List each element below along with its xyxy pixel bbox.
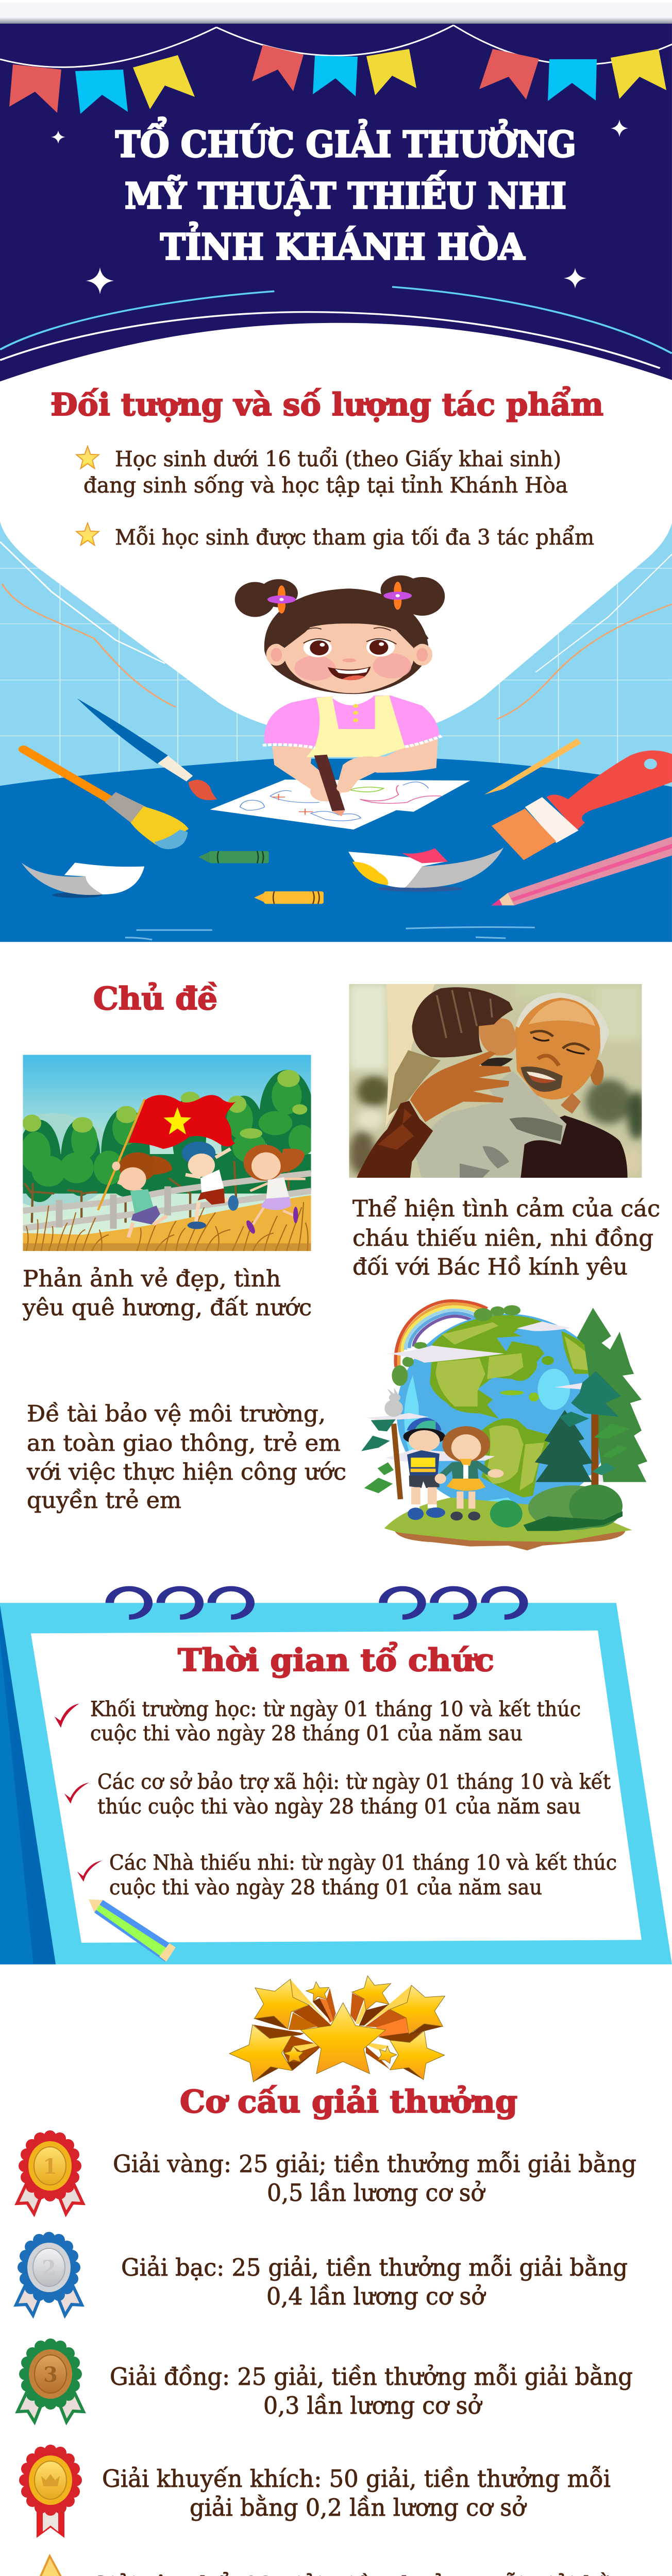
image: photo of Bác Hồ hugging a child: [349, 984, 647, 1178]
girl: [235, 575, 445, 817]
paper with doodles: [210, 779, 470, 829]
text: silver prize: Giải bạc: 25 giải, tiền thưởng mỗi giải bằng: [121, 2253, 628, 2281]
blurred background: [349, 984, 647, 1176]
text: theme labels: Đề tài bảo vệ môi trường,: [27, 1401, 326, 1427]
title: MỸ THUẬT THIẾU NHI: [125, 172, 566, 217]
panel: eligibility text: Học sinh dưới 16 tuổi (theo Giấy khai sinh): [115, 447, 561, 471]
icon: bronze medal: [18, 2338, 83, 2422]
text: schedule: thúc cuộc thi vào ngày 28 tháng 01 của năm sau: [97, 1795, 581, 1819]
text: theme labels: an toàn giao thông, trẻ em: [27, 1430, 341, 1456]
text: theme labels: đối với Bác Hồ kính yêu: [352, 1254, 628, 1280]
curled papers: [22, 848, 503, 898]
icon: golden stars cluster: [229, 1976, 445, 2082]
yellow pencil: [484, 738, 581, 794]
text: silver prize: [121, 2253, 628, 2310]
text: gold prize: Giải vàng: 25 giải; tiền thưởng mỗi giải bằng: [113, 2150, 636, 2178]
bushes: [392, 1305, 520, 1386]
header band: [0, 3, 672, 381]
bunting strings: [0, 25, 672, 67]
ground: [23, 1195, 311, 1251]
text: schedule: cuộc thi vào ngày 28 tháng 01 của năm sau: [109, 1876, 542, 1900]
text: theme labels: quyền trẻ em: [27, 1487, 181, 1514]
text: encouragement prize: Giải khuyến khích: 50 giải, tiền thưởng mỗi: [102, 2465, 611, 2493]
teal pine and leaves: [591, 1401, 598, 1485]
illustration: child drawing at table: [0, 521, 672, 942]
text: schedule: Các Nhà thiếu nhi: từ ngày 01 tháng 10 và kết thúc: [109, 1851, 617, 1875]
trees: [18, 1070, 314, 1202]
grass: [26, 1202, 308, 1251]
fence: [23, 1173, 311, 1228]
text: encouragement prize: [102, 2465, 611, 2521]
island ground: [395, 1531, 626, 1550]
icon: gold medal: 1: [43, 2155, 57, 2179]
heading: chủ đề: Chủ đề: [93, 981, 217, 1017]
panel: eligibility text: [76, 446, 594, 550]
running girl: [244, 1145, 306, 1235]
panel: eligibility text: đang sinh sống và học tập tại tỉnh Khánh Hòa: [83, 473, 568, 498]
boy: [182, 1142, 239, 1229]
girl figure: [435, 1426, 503, 1520]
water strokes: [125, 927, 535, 940]
stars: [229, 1976, 445, 2082]
icon: silver medal: 2: [42, 2256, 56, 2280]
panel: eligibility text: Mỗi học sinh được tham gia tối đa 3 tác phẩm: [115, 525, 594, 550]
icon: gold medal: [17, 2130, 83, 2214]
text: schedule: [90, 1698, 617, 1900]
sleeve: [357, 1101, 433, 1178]
table: [0, 759, 672, 942]
globe: [397, 1314, 616, 1511]
boy figure: [403, 1418, 445, 1520]
kid with flag: [112, 1153, 173, 1238]
title: TỈNH KHÁNH HÒA: [160, 223, 525, 268]
face: [284, 623, 414, 693]
red house-paint brush: [492, 751, 672, 860]
hair back and buns: [235, 582, 275, 617]
pink pencil: [492, 837, 672, 905]
tree trunks: [24, 1161, 289, 1223]
image: earth with children: [361, 1301, 647, 1550]
panel: calendar: [0, 1589, 672, 1964]
text: schedule: Các cơ sở bảo trợ xã hội: từ ngày 01 tháng 10 và kết: [97, 1770, 611, 1794]
rainbow: [396, 1301, 487, 1367]
text: theme labels: Phản ảnh vẻ đẹp, tình: [23, 1266, 281, 1292]
vietnamese flag: [98, 1095, 236, 1209]
text: gold prize: 0,5 lần lương cơ sở: [267, 2179, 485, 2207]
shrubs: [528, 1485, 618, 1530]
heading: đối tượng: Đối tượng và số lượng tác phẩm: [51, 386, 603, 423]
child jacket: [416, 1071, 566, 1178]
heading: thời gian tổ chức: Thời gian tổ chức: [178, 1642, 494, 1679]
blue brush: [77, 699, 217, 800]
text: silver prize: 0,4 lần lương cơ sở: [266, 2282, 486, 2310]
check marks: [55, 1704, 102, 1882]
calendar rings: [110, 1589, 524, 1617]
text: encouragement prize: giải bằng 0,2 lần lương cơ sở: [190, 2494, 527, 2521]
icon: silver medal: [16, 2232, 82, 2315]
icon: star bullet 1: [76, 446, 99, 468]
text: bronze prize: 0,3 lần lương cơ sở: [263, 2392, 482, 2419]
clouds: [366, 1321, 632, 1482]
hands: [561, 1093, 581, 1114]
image: children with flag: [0, 1055, 315, 1251]
sparkles: [51, 120, 628, 294]
face: [590, 1060, 603, 1086]
text: schedule: Khối trường học: từ ngày 01 tháng 10 và kết thúc: [90, 1698, 581, 1721]
star rays: [254, 1979, 443, 2082]
navy arched header: [0, 24, 672, 381]
text: bronze prize: [110, 2363, 633, 2419]
arc strokes: [0, 287, 672, 368]
hands and pencil: [310, 782, 341, 802]
text: theme labels: [22, 1195, 660, 1514]
hair flowers: [267, 582, 412, 614]
title: [115, 118, 576, 268]
tree trunk: [385, 984, 435, 1127]
continents: [430, 1315, 544, 1418]
ears: [266, 644, 287, 666]
text: gold prize: [113, 2150, 636, 2207]
icon: star bullet 2: [76, 523, 99, 545]
sky background: [0, 521, 672, 788]
child head: [479, 1019, 517, 1056]
orange paint brush: [24, 749, 189, 849]
tall pine: [577, 1308, 647, 1482]
text: schedule: cuộc thi vào ngày 28 tháng 01 của năm sau: [90, 1722, 523, 1745]
rabbit: [384, 1387, 403, 1417]
dark coat: [517, 1115, 628, 1178]
text: theme labels: với việc thực hiện công ước: [26, 1459, 346, 1485]
heading: cơ cấu giải thưởng: Cơ cấu giải thưởng: [180, 2084, 517, 2120]
left tree: [394, 1423, 400, 1499]
text: theme labels: Thể hiện tình cảm của các: [352, 1195, 660, 1222]
crayons: [198, 851, 324, 904]
bunting flags: [9, 45, 666, 114]
icon: encouragement medal: [19, 2445, 82, 2538]
dark pine: [535, 1410, 593, 1482]
icon: collective star: [15, 2556, 85, 2576]
text: bronze prize: Giải đồng: 25 giải, tiền thưởng mỗi giải bằng: [110, 2363, 633, 2391]
pencil: [89, 1900, 176, 1962]
title: TỔ CHỨC GIẢI THƯỞNG: [115, 118, 576, 165]
text: theme labels: cháu thiếu niên, nhi đồng: [352, 1225, 653, 1251]
text: theme labels: yêu quê hương, đất nước: [22, 1295, 312, 1321]
icon: bronze medal: 3: [43, 2363, 58, 2387]
